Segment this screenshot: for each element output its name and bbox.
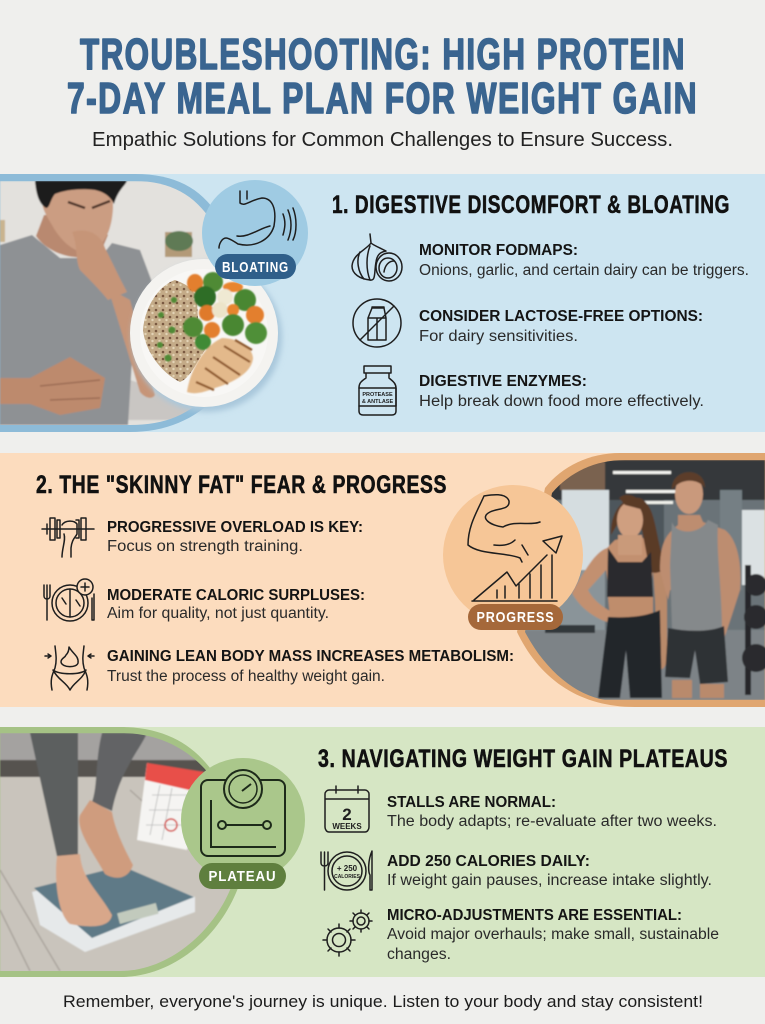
icon: onion and garlic xyxy=(352,234,402,281)
label pill: bloating: BLOATING xyxy=(222,259,289,276)
icon: two weeks calendar: WEEKS xyxy=(332,822,362,831)
plate of quinoa, vegetables and chicken xyxy=(130,259,282,412)
icon: plate with plus 250 calories xyxy=(321,851,372,890)
icon: plate with plus 250 calories: CALORIES xyxy=(334,874,361,880)
item: progressive overload: Focus on strength training. xyxy=(107,538,303,555)
photo: couple in gym xyxy=(517,453,765,707)
item: monitor FODMAPs: Onions, garlic, and certain dairy can be triggers. xyxy=(419,262,749,279)
item: progressive overload xyxy=(42,518,363,557)
label pill: progress: PROGRESS xyxy=(476,609,554,626)
item: micro-adjustments: MICRO-ADJUSTMENTS ARE ESSENTIAL: xyxy=(387,907,682,924)
photo: feet stepping on bathroom scale xyxy=(0,727,240,977)
icon: plate with plus 250 calories: + 250 xyxy=(337,864,358,873)
item: add 250 calories daily: ADD 250 CALORIES DAILY: xyxy=(387,853,590,870)
panel: digestive discomfort and bloating xyxy=(0,174,765,432)
icon: flat scale plateau badge xyxy=(181,758,305,889)
item: stalls are normal: STALLS ARE NORMAL: xyxy=(387,794,556,811)
item: moderate caloric surpluses: MODERATE CALORIC SURPLUSES: xyxy=(107,587,365,604)
icon: two weeks calendar: 2 xyxy=(342,805,352,824)
item: lactose-free options xyxy=(353,299,703,347)
icon: waist with flame xyxy=(45,646,94,690)
item: lean body mass and metabolism: Trust the process of healthy weight gain. xyxy=(107,668,385,685)
panel: skinny fat fear and progress xyxy=(0,453,765,707)
item: monitor FODMAPs: MONITOR FODMAPS: xyxy=(419,242,578,259)
icon: enzyme supplement bottle xyxy=(359,366,396,415)
man xyxy=(660,515,740,645)
item: monitor FODMAPs xyxy=(352,234,749,281)
item: digestive enzymes xyxy=(359,366,704,415)
label pill: plateau: PLATEAU xyxy=(208,868,276,885)
photo: man with stomach discomfort and meal plate xyxy=(0,174,308,432)
item: micro-adjustments: changes. xyxy=(387,946,451,963)
item: lactose-free options: For dairy sensitivities. xyxy=(419,328,578,345)
label pill: progress xyxy=(468,604,563,630)
icon: bloated stomach badge xyxy=(202,180,308,286)
item: moderate caloric surpluses: Aim for quality, not just quantity. xyxy=(107,605,329,622)
heading: section 2: 2. THE "SKINNY FAT" FEAR & PROGRESS xyxy=(36,471,447,499)
icon: crossed-out milk carton xyxy=(353,299,401,347)
icon: gears xyxy=(323,910,372,956)
panel: navigating weight gain plateaus xyxy=(0,727,765,977)
item: add 250 calories daily: If weight gain pauses, increase intake slightly. xyxy=(387,872,712,889)
item: progressive overload: PROGRESSIVE OVERLOAD IS KEY: xyxy=(107,519,363,536)
item: moderate caloric surpluses xyxy=(44,579,365,622)
item: lean body mass and metabolism xyxy=(45,646,514,690)
item: digestive enzymes: Help break down food more effectively. xyxy=(419,393,704,410)
icon: two weeks calendar xyxy=(325,786,369,832)
icon: hand lifting dumbbell xyxy=(42,518,94,557)
icon: enzyme supplement bottle: & ANTLASE xyxy=(362,399,393,405)
icon: plate with fork, knife and plus sign xyxy=(44,579,94,621)
item: stalls are normal xyxy=(325,786,717,832)
icon: enzyme supplement bottle: PROTEASE xyxy=(362,392,393,398)
item: digestive enzymes: DIGESTIVE ENZYMES: xyxy=(419,373,587,390)
item: micro-adjustments: Avoid major overhauls; make small, sustainable xyxy=(387,926,719,943)
woman xyxy=(572,535,655,622)
title xyxy=(67,30,698,123)
icon: flexed arm and rising chart badge xyxy=(443,485,583,630)
subtitle: Empathic Solutions for Common Challenges to Ensure Success. xyxy=(92,129,673,151)
item: stalls are normal: The body adapts; re-evaluate after two weeks. xyxy=(387,813,717,830)
item: micro-adjustments xyxy=(323,907,719,963)
item: lean body mass and metabolism: GAINING LEAN BODY MASS INCREASES METABOLISM: xyxy=(107,648,514,665)
item: lactose-free options: CONSIDER LACTOSE-FREE OPTIONS: xyxy=(419,308,703,325)
footer message: Remember, everyone's journey is unique. Listen to your body and stay consistent! xyxy=(63,992,703,1011)
item: add 250 calories daily xyxy=(321,851,712,890)
